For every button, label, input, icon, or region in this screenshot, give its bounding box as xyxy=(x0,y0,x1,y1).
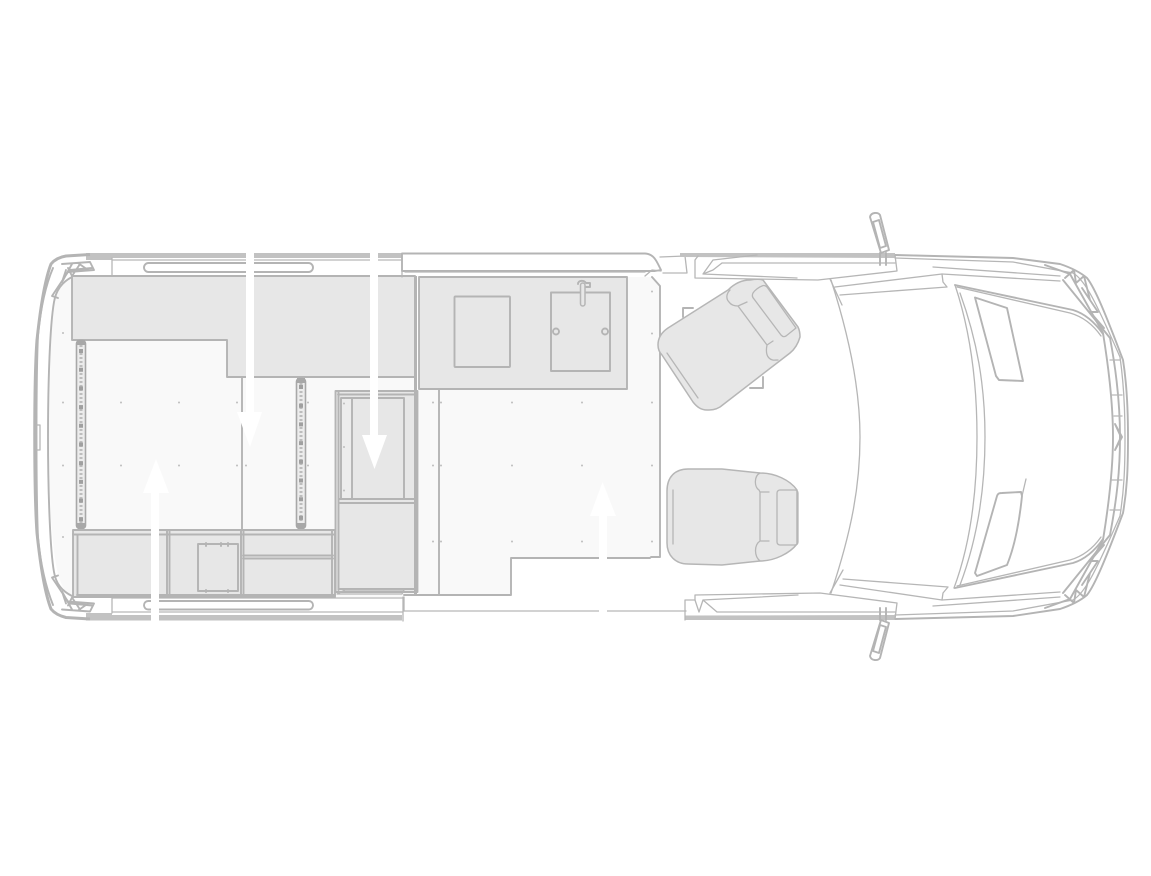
kitchen counter xyxy=(416,276,627,594)
upper storage panel xyxy=(72,276,415,377)
mirror: top xyxy=(870,213,889,265)
arrow: down rear xyxy=(237,250,262,447)
cab door: bottom xyxy=(685,570,948,620)
mirror: bottom xyxy=(870,608,889,660)
passenger seat (rotated) xyxy=(658,279,800,410)
stove xyxy=(454,296,510,367)
cab: hood lines xyxy=(955,285,1103,588)
cab: wiper bottom xyxy=(975,492,1022,576)
rear floor xyxy=(49,277,415,597)
cab: wiper top xyxy=(975,298,1023,381)
rail: rear xyxy=(76,340,86,528)
side cabinet block xyxy=(336,391,418,594)
driver seat xyxy=(667,469,798,565)
hatch panel xyxy=(198,544,238,591)
front floor xyxy=(419,277,660,595)
faucet xyxy=(578,281,590,287)
floor fastener dots xyxy=(62,290,653,542)
arrow: up rear xyxy=(143,459,169,622)
sliding door xyxy=(402,254,687,611)
cab door: top xyxy=(680,253,947,305)
rear cabinets xyxy=(73,530,335,597)
rail: middle xyxy=(296,378,306,528)
corner mesh: bottom xyxy=(52,576,94,612)
passenger seat base xyxy=(683,308,763,388)
cab: dashboard xyxy=(831,280,860,593)
sink xyxy=(551,292,610,371)
cab: windshield xyxy=(954,285,985,588)
van body: rear shell xyxy=(35,253,415,621)
arrow: down middle xyxy=(362,250,387,469)
floor divider xyxy=(241,377,243,530)
floor edges xyxy=(404,277,660,595)
arrow: up front xyxy=(590,482,616,612)
corner mesh: top xyxy=(52,262,94,298)
van body: nose xyxy=(895,255,1128,619)
